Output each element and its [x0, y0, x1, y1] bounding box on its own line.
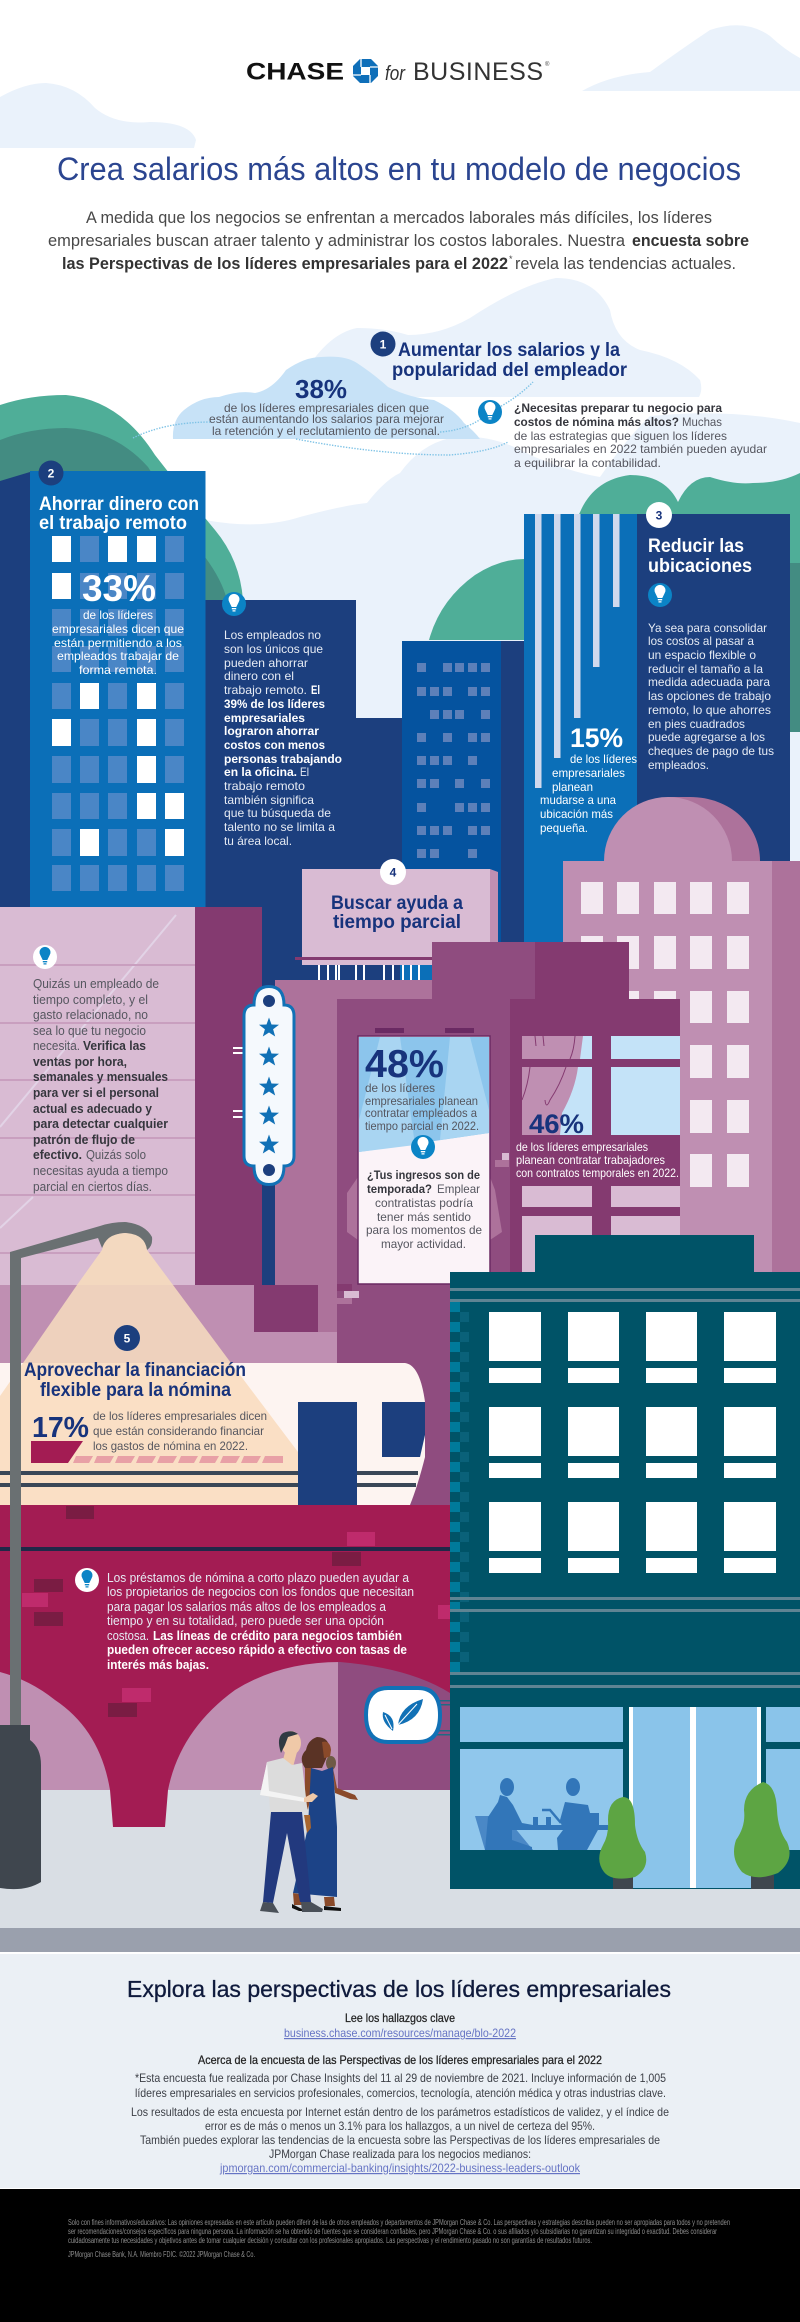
billboard supports — [318, 965, 432, 980]
step number 2 — [38, 460, 64, 486]
stat 15%: planean — [552, 780, 593, 794]
bricks — [22, 1506, 450, 1717]
stat 15%: ubicación más — [540, 807, 613, 821]
curtain shapes — [347, 1177, 502, 1240]
tip text: los costos al pasar a — [648, 634, 754, 648]
stat 48%: 48% — [365, 1043, 444, 1086]
tip text: ventas por hora, — [33, 1054, 127, 1069]
stat 33% — [52, 568, 184, 677]
tip text — [514, 401, 767, 470]
heading — [648, 536, 752, 577]
step number 5 — [114, 1325, 140, 1351]
stripes — [535, 514, 620, 788]
stat 17% with bar — [31, 1409, 283, 1463]
tip text: El — [311, 683, 320, 697]
panel: section 1 wages — [133, 332, 767, 470]
stat 48%: tiempo parcial en 2022. — [365, 1119, 479, 1133]
stat 33%: están permitiendo a los — [54, 636, 182, 650]
panel: teal building — [450, 1235, 800, 1897]
heading: Aumentar los salarios y la — [398, 340, 620, 361]
tip text: las opciones de trabajo — [648, 689, 771, 703]
stat 33%: 33% — [82, 568, 156, 609]
lower windows — [522, 1186, 680, 1276]
tip text: Muchas — [682, 415, 722, 429]
panel: legal footer — [0, 2189, 800, 2322]
stat 38%: están aumentando los salarios para mejorar — [209, 412, 444, 426]
tip text: mayor actividad. — [381, 1237, 466, 1251]
stat 48%: empresariales planean — [365, 1094, 478, 1108]
tip text: que tu búsqueda de — [224, 806, 331, 820]
stat 15%: pequeña. — [540, 821, 588, 835]
stat 48% — [365, 1043, 479, 1133]
intro text — [48, 208, 749, 273]
icon: light bulb — [478, 400, 502, 424]
man — [260, 1731, 323, 1913]
logo: Chase for Business: CHASE — [246, 58, 344, 86]
tip text: para pagar los salarios más altos de los empleados a — [107, 1600, 386, 1614]
tip text: contratistas podría — [375, 1196, 473, 1210]
panel: section 3 locations building — [524, 502, 790, 954]
panel: section 4 billboard — [295, 859, 498, 980]
pink building with dome — [563, 797, 800, 1281]
heading: Explora las perspectivas de los líderes empresariales — [127, 1976, 671, 2002]
tip text: patrón de flujo de — [33, 1132, 135, 1147]
stat 46%: planean contratar trabajadores — [516, 1153, 665, 1167]
logo: Chase for Business: ® — [545, 61, 550, 68]
intro text: revela las tendencias actuales. — [515, 254, 736, 273]
stat 17% with bar: los gastos de nómina en 2022. — [93, 1439, 248, 1453]
step number 2: 2 — [48, 466, 55, 480]
stat 38%: de los líderes empresariales dicen que — [224, 401, 429, 415]
tip text: temporada? — [367, 1182, 432, 1196]
tip text: El — [300, 765, 309, 779]
panel: left pink building with tip — [0, 907, 262, 1285]
tip text: semanales y mensuales — [33, 1069, 168, 1084]
icon: light bulb — [222, 592, 246, 616]
stat 33%: de los líderes — [83, 608, 153, 622]
plants — [599, 1782, 790, 1897]
people in window silhouette — [475, 1778, 608, 1850]
title: Crea salarios más altos en tu modelo de negocios — [57, 151, 741, 187]
tip text — [107, 1571, 414, 1672]
tip text — [366, 1168, 482, 1251]
panel: section 2 remote work building — [30, 460, 342, 907]
ground floor windows and door — [460, 1707, 800, 1888]
stat 33%: empleados trabajar de — [57, 649, 179, 663]
about survey: También puedes explorar las tendencias de la encuesta sobre las Perspectivas de los líderes empresariales de — [140, 2133, 660, 2147]
upper windows — [489, 1312, 776, 1573]
stat 38%: 38% — [295, 374, 347, 404]
step number 1: 1 — [380, 338, 387, 352]
tip text: empresariales en 2022 también pueden ayudar — [514, 442, 767, 456]
about survey — [131, 2053, 669, 2175]
train door and window — [298, 1402, 425, 1505]
panel: section 5 train and lamp light — [0, 1250, 425, 1505]
tip text: de las estrategias que siguen los líderes — [514, 429, 727, 443]
tip text: personas trabajando — [224, 752, 342, 766]
stat 46%: con contratos temporales en 2022. — [516, 1166, 679, 1180]
street lamp — [0, 1222, 152, 1889]
step number 5: 5 — [124, 1332, 131, 1346]
tip text: a equilibrar la contabilidad. — [514, 456, 661, 470]
tip text: tu área local. — [224, 834, 292, 848]
tip text: costos de nómina más altos? — [514, 415, 679, 429]
panel: magenta bridge — [0, 1505, 450, 1827]
light cone — [0, 1250, 298, 1505]
icon: light bulb — [648, 583, 672, 607]
tip text: reducir el tamaño a la — [648, 662, 763, 676]
stat 48%: contratar empleados a — [365, 1106, 477, 1120]
heading — [24, 1360, 246, 1401]
tip text: tiempo y en su totalidad, pero puede ser una opción — [107, 1614, 384, 1628]
tip text: efectivo. — [33, 1147, 82, 1162]
tip text: remoto, lo que ahorres — [648, 703, 771, 717]
tip text: tiempo completo, y el — [33, 992, 148, 1007]
street level wall — [0, 1284, 359, 1505]
heading: Aprovechar la financiación — [24, 1360, 246, 1381]
tip text: Los empleados no — [224, 628, 321, 642]
heading: tiempo parcial — [333, 912, 461, 933]
stat 17% with bar: 17% — [32, 1412, 89, 1444]
background clouds — [0, 25, 800, 875]
about survey: líderes empresariales en servicios profesionales, comercios, tecnología, atención médica y otras industrias clave. — [135, 2086, 666, 2100]
panel: legal footer: JPMorgan Chase Bank, N.A. Miembro FDIC. ©2022 JPMorgan Chase & Co. — [68, 2250, 255, 2259]
stat 38%: la retención y el reclutamiento de personal. — [212, 424, 440, 438]
stat 15%: 15% — [570, 723, 623, 753]
intro text: A medida que los negocios se enfrentan a mercados laborales más difíciles, los líderes — [86, 208, 712, 227]
tip text: Las líneas de crédito para negocios también — [153, 1629, 402, 1643]
heading: ubicaciones — [648, 556, 752, 577]
tip text: actual es adecuado y — [33, 1101, 153, 1116]
sign connector lines — [434, 1700, 450, 1736]
about survey: jpmorgan.com/commercial-banking/insights/2022-business-leaders-outlook — [219, 2161, 581, 2175]
tip text: 39% de los líderes — [224, 697, 325, 711]
stat 15% — [540, 723, 637, 835]
tip text: Los préstamos de nómina a corto plazo pueden ayudar a — [107, 1571, 409, 1585]
tip text — [224, 628, 342, 848]
tip text: costosa. — [107, 1629, 149, 1643]
intro text: encuesta sobre — [632, 231, 749, 250]
heading — [39, 494, 199, 534]
stat 46% — [516, 1109, 679, 1180]
tip text: Verifica las — [83, 1038, 146, 1053]
tip text: un espacio flexible o — [648, 648, 756, 662]
stat 33%: forma remota. — [79, 663, 157, 677]
tip text: los propietarios de negocios con los fondos que necesitan — [107, 1585, 414, 1599]
train — [0, 1363, 425, 1505]
stat 15%: de los líderes — [570, 752, 637, 766]
tip text — [648, 621, 774, 772]
logo: Chase for Business: for — [385, 63, 406, 85]
tip text: puede agregarse a los — [648, 730, 765, 744]
panel: footer explore — [0, 1954, 800, 2188]
tip text: talento no se limita a — [224, 820, 335, 834]
tip text: Quizás un empleado de — [33, 976, 159, 991]
icon: Chase octagon — [353, 59, 378, 83]
tip text: ¿Necesitas preparar tu negocio para — [514, 401, 722, 415]
panel: purple shop buildings — [275, 942, 680, 1505]
intro text: las Perspectivas de los líderes empresariales para el 2022 — [62, 254, 508, 273]
key findings: business.chase.com/resources/manage/blo-2022 — [284, 2026, 516, 2040]
step number 3: 3 — [656, 508, 663, 522]
tip text: medida adecuada para — [648, 675, 770, 689]
intro text: * — [509, 254, 513, 264]
about survey: Los resultados de esta encuesta por Internet están dentro de los parámetros estadísticos de validez, y el índice de — [131, 2105, 669, 2119]
tip text: Ya sea para consolidar — [648, 621, 767, 635]
heading: flexible para la nómina — [40, 1380, 231, 1401]
tip text: costos con menos — [224, 738, 325, 752]
tip text — [33, 976, 168, 1194]
key findings — [284, 2011, 516, 2040]
windows grid — [52, 536, 184, 891]
stat 15%: empresariales — [552, 766, 625, 780]
tip text: parcial en ciertos días. — [33, 1179, 152, 1194]
panel: building B with small windows — [402, 641, 524, 951]
step number 4: 4 — [390, 866, 397, 880]
tip text: Emplear — [437, 1182, 480, 1196]
stat 17% with bar: que están considerando financiar — [93, 1424, 264, 1438]
tip text: empleados. — [648, 758, 709, 772]
tip text: empresariales — [224, 711, 305, 725]
tip text: ¿Tus ingresos son de — [367, 1168, 480, 1182]
icon: leaf sign — [366, 1688, 440, 1742]
tip text: lograron ahorrar — [224, 724, 319, 738]
small bricks — [375, 1028, 509, 1167]
tip text: pueden ofrecer acceso rápido a efectivo con tasas de — [107, 1643, 407, 1657]
step number 3 — [646, 502, 672, 528]
heading: popularidad del empleador — [392, 360, 628, 381]
tip text: tener más sentido — [377, 1210, 471, 1224]
heading: Buscar ayuda a — [331, 893, 463, 914]
tip text: interés más bajas. — [107, 1658, 209, 1672]
tip text: necesitas ayuda a tiempo — [33, 1163, 168, 1178]
about survey: *Esta encuesta fue realizada por Chase Insights del 11 al 29 de noviembre de 2021. Incluye información de 1,005 — [135, 2071, 666, 2085]
tip text: cheques de pago de tus — [648, 744, 774, 758]
about survey: error es de más o menos un 3.1% para los hallazgos, a un nivel de certeza del 95%. — [205, 2119, 595, 2133]
stat 33%: empresariales dicen que — [52, 622, 184, 636]
heading — [331, 893, 463, 933]
tip text: necesita. — [33, 1038, 80, 1053]
tip text: sea lo que tu negocio — [33, 1023, 146, 1038]
stat 38% — [209, 374, 444, 438]
panel: shop window with 48% — [358, 1036, 490, 1284]
panel: hanging star sign — [233, 986, 294, 1184]
step number 1 — [370, 332, 396, 356]
stat 17% with bar: de los líderes empresariales dicen — [93, 1409, 267, 1423]
people walking — [260, 1731, 358, 1913]
heading: Ahorrar dinero con — [39, 494, 199, 515]
stripes — [450, 1288, 800, 1688]
stat 15%: mudarse a una — [540, 793, 616, 807]
tip text: pueden ahorrar — [224, 656, 308, 670]
woman — [292, 1737, 358, 1911]
intro text: empresariales buscan atraer talento y administrar los costos laborales. Nuestra — [48, 231, 626, 250]
navy backdrop buildings — [0, 472, 525, 1288]
heading — [392, 340, 628, 381]
heading: Reducir las — [648, 536, 744, 557]
panel: legal footer: cuidadosamente tus necesidades y objetivos antes de tomar cualquier decisión y consultar con los profesionales apropiados. Las perspectivas y el rendimiento pasado no son garantías de resultados futuros. — [68, 2236, 592, 2245]
tip text: son los únicos que — [224, 642, 323, 656]
stat 46%: 46% — [529, 1109, 584, 1139]
tip text: en pies cuadrados — [648, 717, 745, 731]
key findings: Lee los hallazgos clave — [345, 2011, 455, 2025]
tip text: para ver si el personal — [33, 1085, 159, 1100]
tip text: para los momentos de — [366, 1223, 482, 1237]
tip text: también significa — [224, 793, 314, 807]
tip text: Quizás solo — [86, 1147, 146, 1162]
about survey: Acerca de la encuesta de las Perspectivas de los líderes empresariales para el 2022 — [198, 2053, 602, 2067]
icon: light bulb — [33, 945, 57, 969]
tip text: en la oficina. — [224, 765, 297, 779]
logo: Chase for Business — [246, 58, 550, 86]
stat 46%: de los líderes empresariales — [516, 1140, 648, 1154]
icon: light bulb — [75, 1568, 99, 1592]
logo: Chase for Business: BUSINESS — [413, 58, 543, 86]
icon: light bulb — [411, 1135, 435, 1159]
heading: el trabajo remoto — [39, 513, 187, 534]
step number 4 — [380, 859, 406, 885]
tip text: dinero con el — [224, 669, 294, 683]
blue cloud — [173, 357, 480, 439]
about survey: JPMorgan Chase realizada para los negocios medianos: — [269, 2147, 531, 2161]
tip text: gasto relacionado, no — [33, 1007, 148, 1022]
green hills — [0, 395, 800, 732]
tip text: trabajo remoto — [224, 779, 305, 793]
stat 48%: de los líderes — [365, 1081, 435, 1095]
tip text: trabajo remoto. — [224, 683, 307, 697]
sidewalk and road — [0, 1790, 800, 1952]
tip text: para detectar cualquier — [33, 1116, 168, 1131]
upper windows — [522, 1036, 680, 1135]
dotted connectors — [133, 382, 533, 455]
